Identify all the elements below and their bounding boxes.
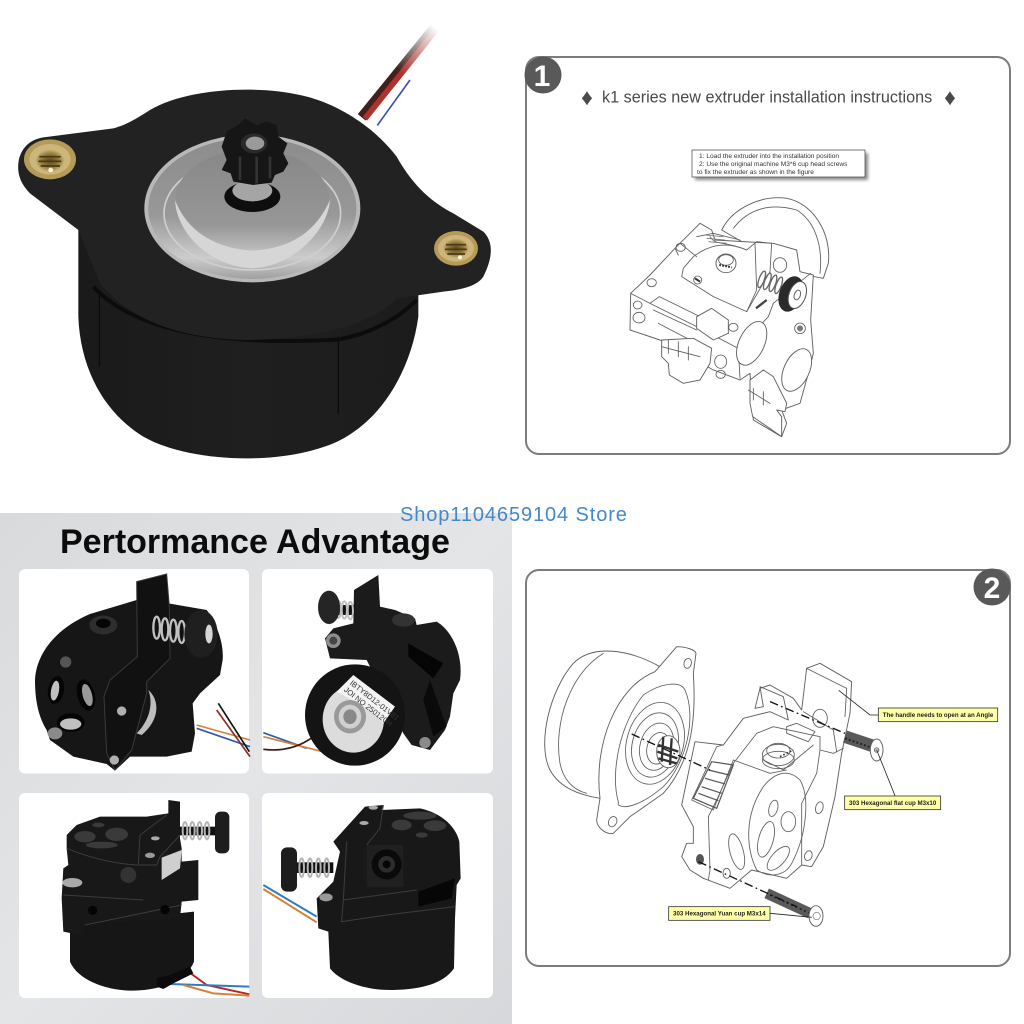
badge 1: 1 — [534, 60, 550, 93]
pinion — [657, 736, 680, 768]
photo card 2 — [262, 569, 493, 774]
motor — [545, 647, 696, 834]
panel 1: installation instructions — [524, 56, 1010, 454]
callout: handle: The handle needs to open at an Angle — [883, 712, 994, 719]
callout: handle — [839, 690, 998, 722]
callout: round cup — [669, 907, 812, 920]
brass insert right — [434, 231, 478, 266]
knurled knob — [774, 273, 810, 315]
label — [337, 675, 401, 728]
bearing — [334, 700, 366, 733]
wires — [170, 972, 249, 996]
fitting — [392, 613, 415, 627]
instruction callout — [692, 150, 868, 180]
exploded line drawing — [545, 647, 998, 926]
lower left clip — [662, 338, 712, 383]
panel 1 title: ♦ — [581, 84, 593, 110]
panel 2: assembly — [526, 568, 1010, 966]
wires — [263, 885, 317, 922]
label: IBTY8D12-01V81 — [348, 678, 401, 723]
fitting bore — [89, 616, 117, 634]
body edges — [342, 805, 455, 922]
spring — [153, 617, 187, 643]
lower clip details — [662, 340, 700, 360]
label: JOI NO 250120H — [342, 685, 394, 728]
knob — [184, 610, 218, 658]
motor wire block — [157, 967, 193, 989]
top plate edges — [63, 815, 182, 925]
extruder line drawing — [630, 198, 829, 437]
watermark: Shop1104659104 Store — [400, 504, 628, 526]
photo card 3 — [19, 793, 249, 998]
motor flange — [18, 90, 491, 340]
badge 2: 2 — [984, 572, 1000, 605]
upper silhouette — [62, 800, 198, 935]
housing bosses — [696, 709, 827, 878]
top holes — [319, 806, 446, 901]
top screw — [845, 737, 883, 761]
panel 1 title — [581, 84, 956, 110]
spring — [180, 822, 215, 839]
instruction callout: 2: Use the original machine M3*6 cup head screws — [699, 161, 848, 168]
gear teeth — [418, 878, 455, 907]
photo card 1 — [19, 569, 250, 774]
lower right details — [748, 388, 770, 405]
motor wires — [362, 20, 442, 125]
brass insert left — [24, 139, 76, 179]
instruction callout: to fix the extruder as shown in the figure — [697, 169, 814, 176]
gear wheel — [137, 690, 156, 735]
knob — [318, 591, 340, 624]
spring — [756, 270, 784, 294]
central boss — [694, 254, 736, 284]
panel 1 title: ♦ — [944, 84, 956, 110]
spring — [297, 858, 333, 877]
motor photo — [18, 20, 491, 458]
extruder body — [35, 600, 223, 771]
pins — [48, 706, 126, 765]
callout: flat cup — [845, 750, 941, 810]
fitting — [367, 845, 403, 887]
motor end face — [305, 664, 405, 766]
motor pinion gear — [222, 118, 288, 185]
pinion teeth — [408, 643, 443, 678]
panel: performance advantage — [0, 513, 512, 1024]
grey background — [0, 513, 512, 1024]
badge 2 — [974, 568, 1010, 606]
body silhouette — [317, 805, 461, 990]
axis dashed lines — [632, 702, 845, 907]
callout: round cup: 303 Hexagonal Yuan cup M3x14 — [673, 911, 766, 918]
spring — [335, 601, 355, 619]
motor behind — [722, 198, 829, 278]
extruder housing — [682, 663, 852, 888]
slots — [46, 656, 99, 732]
callout: flat cup: 303 Hexagonal flat cup M3x10 — [849, 800, 937, 807]
housing upper — [630, 223, 813, 437]
small screw — [756, 300, 767, 308]
gear rack — [693, 762, 733, 808]
handle — [104, 574, 170, 770]
body shade — [423, 680, 447, 737]
housing holes — [633, 243, 818, 396]
badge 1 — [524, 56, 562, 94]
motor body — [78, 230, 418, 458]
panel frame — [526, 570, 1010, 966]
panel frame — [526, 57, 1010, 454]
lower right clip — [750, 370, 787, 437]
motor — [70, 912, 194, 991]
motor bearing plate — [144, 134, 360, 282]
latch block — [697, 308, 728, 340]
wires — [263, 733, 327, 753]
body — [325, 575, 461, 750]
face plate — [323, 686, 384, 753]
photo card 4 — [262, 793, 493, 998]
heading: Pertormance Advantage — [60, 523, 450, 561]
top plate holes — [62, 823, 170, 915]
panel 1 title: k1 series new extruder installation instructions — [602, 88, 932, 106]
gear band — [162, 850, 182, 880]
motor body seam lines — [93, 287, 417, 413]
instruction callout: 1: Load the extruder into the installation position — [699, 153, 839, 160]
bottom screw — [767, 893, 823, 926]
knob — [215, 812, 229, 853]
knob — [281, 847, 297, 892]
wires — [197, 703, 250, 757]
mounting pins — [326, 633, 431, 748]
